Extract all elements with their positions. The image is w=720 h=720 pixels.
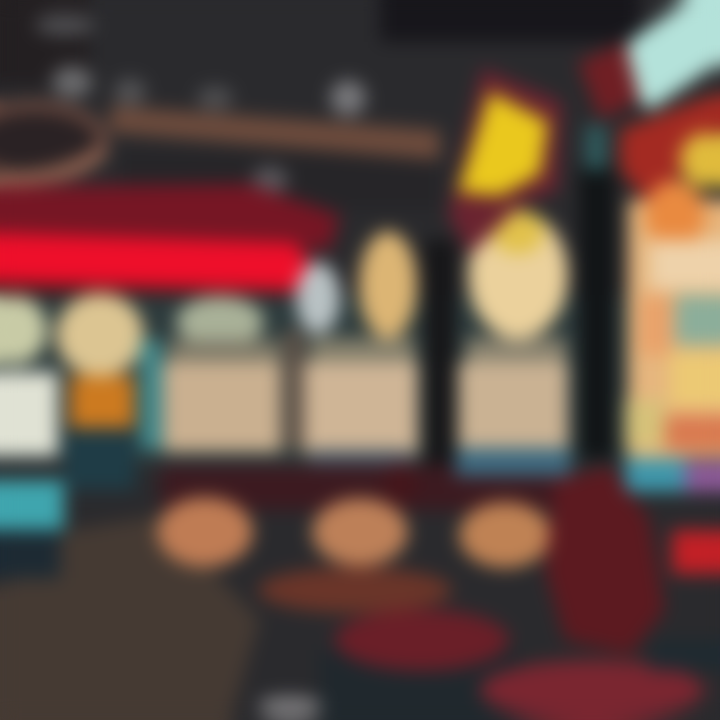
shelf band	[110, 106, 440, 160]
top right window and red sign	[578, 0, 720, 205]
ceiling spots	[35, 15, 366, 194]
black pillars	[424, 125, 615, 465]
slot machines: centre cabinets	[163, 210, 570, 476]
ceiling ring light	[0, 106, 104, 178]
stools: orange seats	[157, 497, 551, 568]
stools: dark red seats and chair	[258, 462, 720, 720]
yellow flag sign	[448, 68, 562, 255]
red canopy	[0, 184, 340, 304]
slot machines: left	[0, 293, 720, 578]
slot machine: right colourful screen	[625, 180, 720, 492]
